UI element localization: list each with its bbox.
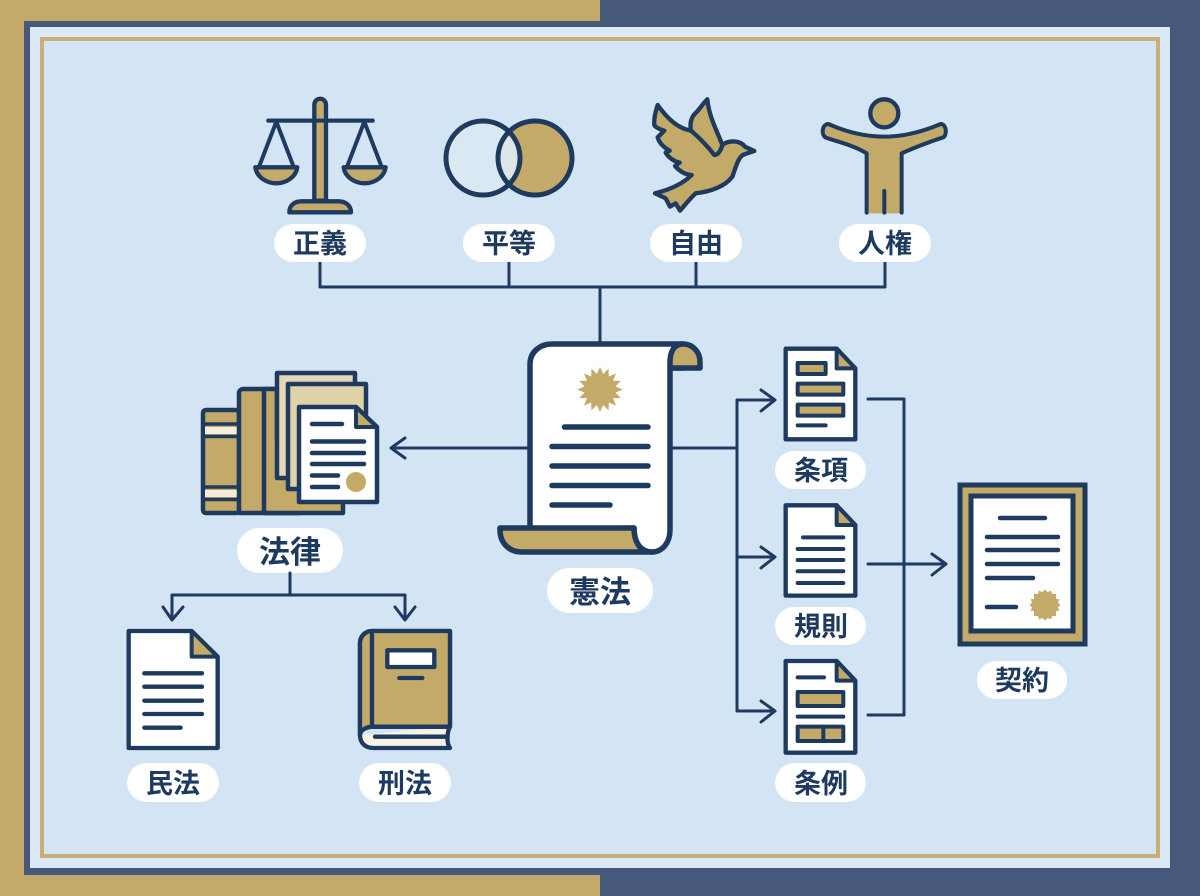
icon: dove [654, 99, 754, 211]
label: 条項: 条項 [794, 456, 848, 486]
label: 条項 [775, 451, 866, 489]
label: 法律 [237, 528, 343, 573]
label: 法律: 法律 [259, 535, 321, 570]
icon: overlapping circles [446, 121, 572, 195]
icon: rules document [786, 505, 855, 596]
icon: clause document [786, 349, 855, 439]
icon: law books and documents [203, 373, 377, 513]
icon: criminal law book [360, 631, 450, 748]
label: 人権 [839, 224, 931, 262]
icon: constitution scroll [500, 344, 700, 552]
connector: values to constitution [320, 262, 885, 344]
label: 規則 [775, 607, 866, 645]
label: 民法: 民法 [146, 769, 200, 799]
icon: ordinance document [786, 661, 855, 753]
label: 民法 [127, 763, 219, 802]
label: 契約: 契約 [995, 666, 1049, 696]
connector: clauses to contract [868, 399, 946, 715]
label: 条例 [775, 763, 866, 802]
label: 憲法: 憲法 [569, 575, 631, 610]
label: 条例: 条例 [794, 769, 848, 799]
label: 自由: 自由 [669, 229, 723, 259]
label: 刑法 [359, 763, 451, 802]
icon: framed contract [960, 485, 1085, 644]
label: 平等: 平等 [482, 229, 536, 259]
label: 刑法: 刑法 [378, 769, 432, 799]
connector: constitution to laws [391, 438, 528, 458]
label: 規則: 規則 [794, 612, 848, 642]
label: 平等 [463, 224, 555, 262]
connector: laws to civil and criminal [163, 573, 415, 620]
label: 正義: 正義 [293, 229, 347, 259]
label: 憲法 [547, 568, 653, 613]
icon: scales of justice [255, 99, 386, 212]
icon: civil law document [129, 631, 218, 748]
label: 正義 [274, 224, 366, 262]
icon: person with raised arms [823, 99, 946, 213]
label: 契約 [977, 661, 1067, 699]
label: 自由 [650, 224, 742, 262]
connector: constitution to clauses [672, 390, 775, 722]
label: 人権: 人権 [858, 229, 912, 259]
